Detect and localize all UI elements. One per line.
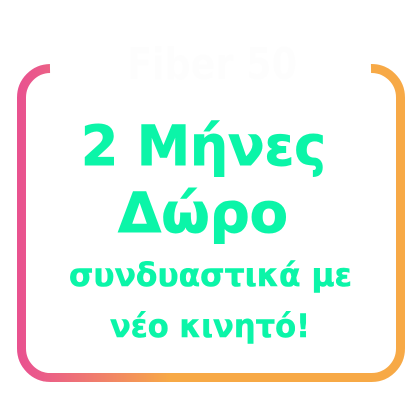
subheading: συνδυαστικά με νέο κινητό!: συνδυαστικά με	[69, 256, 352, 294]
headline: 2 Μήνες Δώρο: 2 Μήνες	[81, 114, 326, 178]
title: Fiber 50: Fiber 50	[127, 39, 297, 90]
headline: 2 Μήνες Δώρο: Δώρο	[118, 181, 288, 245]
subheading: συνδυαστικά με νέο κινητό!: νέο κινητό!	[110, 307, 310, 345]
headline: 2 Μήνες Δώρο	[81, 114, 326, 245]
rounded frame with gradient stroke	[22, 68, 400, 378]
subheading: συνδυαστικά με νέο κινητό!	[69, 256, 352, 345]
